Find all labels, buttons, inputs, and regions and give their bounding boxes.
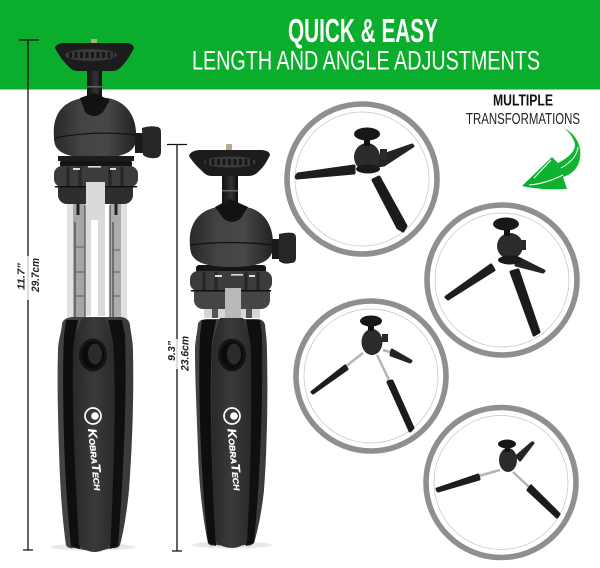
dimension: extended height [16,40,42,550]
dimension: extended height: 29.7cm [30,258,42,293]
tripod: extended [51,39,161,552]
ball head [54,93,136,161]
label: multiple transformations: MULTIPLE [493,92,553,110]
logo [224,408,245,491]
circle: pose 2 [427,205,577,355]
circle: pose 1 [287,104,437,254]
ground shadow [192,542,272,548]
lower body [195,318,267,548]
side knob [272,233,296,264]
ring [296,301,446,451]
icon: green curved arrow [522,128,580,189]
header band [0,0,600,90]
button [79,338,107,372]
dimension: compact height [166,144,192,551]
circle: pose 3 [296,301,446,451]
logo [85,408,105,491]
dimension: extended height: 11.7” [16,262,28,290]
mounting plate [55,39,134,71]
label: multiple transformations [466,92,580,128]
logo: KobraTech [85,428,105,491]
lower body [58,317,133,552]
ring [427,205,577,355]
ring [426,408,576,558]
dimension: compact height: 23.6cm [180,336,192,372]
mini tripod [296,128,413,231]
mini tripod [437,440,559,517]
neck [222,174,238,204]
neck [87,68,102,98]
circle: pose 4 [426,408,576,558]
mounting plate [189,144,270,176]
mini tripod [312,316,413,431]
tripod: compact [189,144,296,548]
button [218,338,246,372]
rotating collar [54,160,138,204]
side knob [135,126,161,158]
ball head [190,199,273,267]
mini tripod [446,218,544,335]
dimension: compact height: 9.3” [166,340,178,361]
rotating collar [190,265,272,318]
silver extended legs [67,182,127,320]
ring [287,104,437,254]
title: QUICK & EASY [288,12,438,49]
logo: KobraTech [225,428,245,491]
silver stubs [204,305,260,318]
ground shadow [51,544,135,550]
